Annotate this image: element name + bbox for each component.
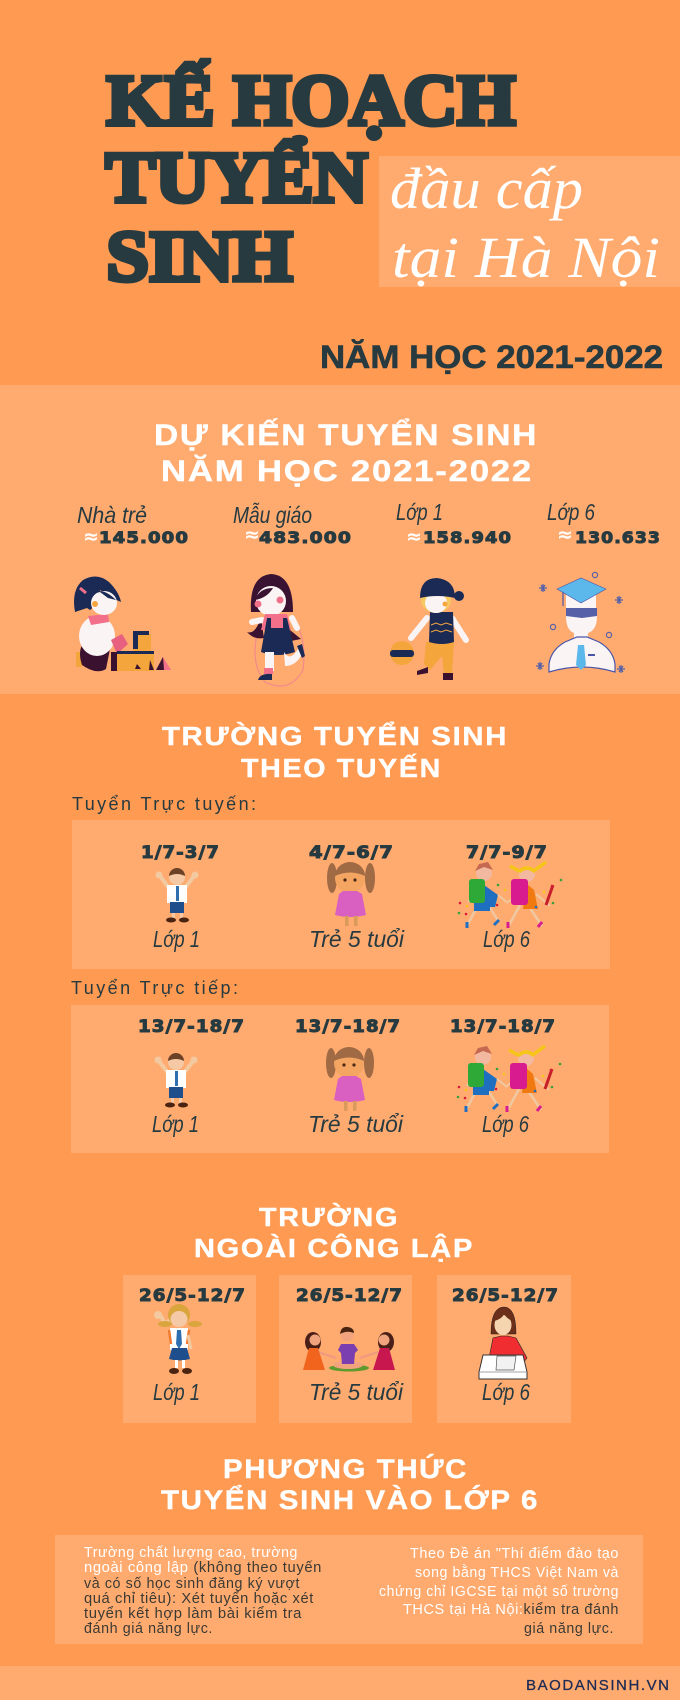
- stat: nursery: [77, 502, 189, 548]
- text block: quality and private schools: quá chỉ tiêu): Xét tuyển hoặc xét: [84, 1591, 314, 1607]
- subtitle panel: đầu cấp: [390, 156, 583, 221]
- stat: kindergarten: 483.000: [259, 528, 352, 547]
- panel: enrollment forecast: [0, 385, 680, 694]
- column: grade 1 online: 1/7-3/7: [141, 843, 220, 863]
- label: online enrollment: Tuyển Trực tuyến:: [72, 794, 256, 814]
- panel: in-person enrollment: [71, 1005, 609, 1153]
- card: private age 5: Trẻ 5 tuổi: [309, 1379, 404, 1405]
- stat: nursery: Nhà trẻ: [77, 502, 147, 528]
- column: age 5 in person: 13/7-18/7: [295, 1017, 401, 1037]
- card: private age 5: [279, 1275, 412, 1423]
- icon: boy with ball: [390, 578, 466, 680]
- title: [106, 60, 516, 296]
- card: private grade 6: [437, 1275, 571, 1423]
- heading: forecast: NĂM HỌC 2021-2022: [161, 454, 533, 488]
- heading: schools by zone: [162, 721, 508, 783]
- icon: graduate with book: [536, 572, 625, 673]
- text block: dual program: giá năng lực.: [524, 1621, 614, 1637]
- column: grade 1 in person: 13/7-18/7: [138, 1017, 245, 1037]
- card: private grade 1: Lớp 1: [153, 1379, 200, 1405]
- column: age 5 in person: Trẻ 5 tuổi: [308, 1111, 404, 1137]
- title: SINH: [106, 216, 292, 296]
- icon: children in a circle: [303, 1327, 395, 1372]
- card: private age 5: 26/5-12/7: [296, 1286, 403, 1306]
- column: grade 1 online: Lớp 1: [153, 926, 200, 952]
- heading: grade 6 admission: PHƯƠNG THỨC: [223, 1453, 468, 1484]
- text block: quality and private schools: Trường chất lượng cao, trường: [84, 1545, 298, 1561]
- title: TUYỂN: [106, 136, 368, 218]
- text block: dual program: Theo Đề án "Thí điểm đào tạo: [410, 1546, 619, 1562]
- text block: quality and private schools: ngoài công lập (không theo tuyến: [84, 1560, 322, 1576]
- text block: quality and private schools: đánh giá năng lực.: [84, 1621, 213, 1637]
- panel: online enrollment: [72, 820, 610, 969]
- column: age 5 online: Trẻ 5 tuổi: [309, 926, 405, 952]
- heading: schools by zone: TRƯỜNG TUYỂN SINH: [162, 721, 508, 751]
- column: grade 6 online: 7/7-9/7: [466, 843, 548, 863]
- icon: girl with jump rope: [247, 574, 305, 686]
- text block: quality and private schools: [84, 1545, 322, 1637]
- heading: private schools: NGOÀI CÔNG LẬP: [194, 1233, 474, 1263]
- column: age 5 online: 4/7-6/7: [309, 843, 394, 863]
- heading: forecast: DỰ KIẾN TUYỂN SINH: [154, 418, 538, 452]
- heading: private schools: TRƯỜNG: [259, 1202, 399, 1232]
- footer band: [0, 1666, 680, 1700]
- card: private grade 6: Lớp 6: [482, 1379, 530, 1405]
- stat: grade 1: [396, 499, 512, 548]
- text block: quality and private schools: và có số học sinh đăng ký vượt: [84, 1576, 300, 1592]
- stat: grade 6: [547, 499, 661, 547]
- subtitle panel: [379, 156, 680, 290]
- column: grade 1 in person: Lớp 1: [152, 1111, 199, 1137]
- card: private grade 1: [123, 1275, 256, 1423]
- heading: schools by zone: THEO TUYẾN: [241, 753, 442, 783]
- stat: kindergarten: Mẫu giáo: [233, 501, 312, 528]
- column: age 5 in person: [295, 1017, 404, 1137]
- heading: private schools: [194, 1202, 474, 1263]
- subtitle panel: tại Hà Nội: [392, 225, 660, 290]
- text block: dual program: [379, 1546, 619, 1637]
- stat: nursery: ≈: [83, 526, 99, 548]
- card: private grade 6: 26/5-12/7: [452, 1286, 559, 1306]
- source credit: BAODANSINH.VN: [526, 1677, 669, 1694]
- text block: dual program: chứng chỉ IGCSE tại một số trường: [379, 1584, 619, 1600]
- school year heading: NĂM HỌC 2021-2022: [320, 339, 663, 375]
- icon: schoolgirl: [154, 1304, 202, 1374]
- stat: grade 1: ≈: [406, 526, 422, 548]
- column: grade 6 online: Lớp 6: [483, 926, 530, 952]
- stat: kindergarten: ≈: [244, 524, 260, 546]
- heading: grade 6 admission: [161, 1453, 539, 1515]
- panel: admission methods: [55, 1535, 643, 1644]
- heading: grade 6 admission: TUYỂN SINH VÀO LỚP 6: [161, 1484, 539, 1515]
- column: grade 1 in person: [138, 1017, 245, 1137]
- icon: girl with blocks: [74, 576, 171, 671]
- stat: kindergarten: [233, 501, 352, 547]
- card: private grade 1: 26/5-12/7: [139, 1286, 246, 1306]
- text block: dual program: song bằng THCS Việt Nam và: [415, 1564, 619, 1581]
- stat: grade 1: 158.940: [423, 528, 512, 547]
- text block: dual program: THCS tại Hà Nội:kiểm tra đánh: [403, 1602, 619, 1618]
- stat: grade 1: Lớp 1: [396, 499, 443, 525]
- heading: forecast: [154, 418, 538, 488]
- column: grade 6 in person: [450, 1017, 561, 1137]
- text block: quality and private schools: tuyển kết hợp làm bài kiểm tra: [84, 1606, 302, 1622]
- column: grade 6 in person: 13/7-18/7: [450, 1017, 556, 1037]
- stat: grade 6: ≈: [557, 524, 573, 546]
- stat: grade 6: Lớp 6: [547, 499, 595, 525]
- column: grade 6 in person: Lớp 6: [482, 1111, 529, 1137]
- column: age 5 online: [309, 843, 405, 952]
- title: KẾ HOẠCH: [106, 60, 516, 140]
- label: in-person enrollment: Tuyển Trực tiếp:: [71, 978, 238, 998]
- column: grade 6 online: [458, 843, 562, 952]
- icon: student writing: [479, 1307, 527, 1379]
- stat: nursery: 145.000: [99, 528, 189, 547]
- stat: grade 6: 130.633: [575, 528, 661, 547]
- column: grade 1 online: [141, 843, 220, 952]
